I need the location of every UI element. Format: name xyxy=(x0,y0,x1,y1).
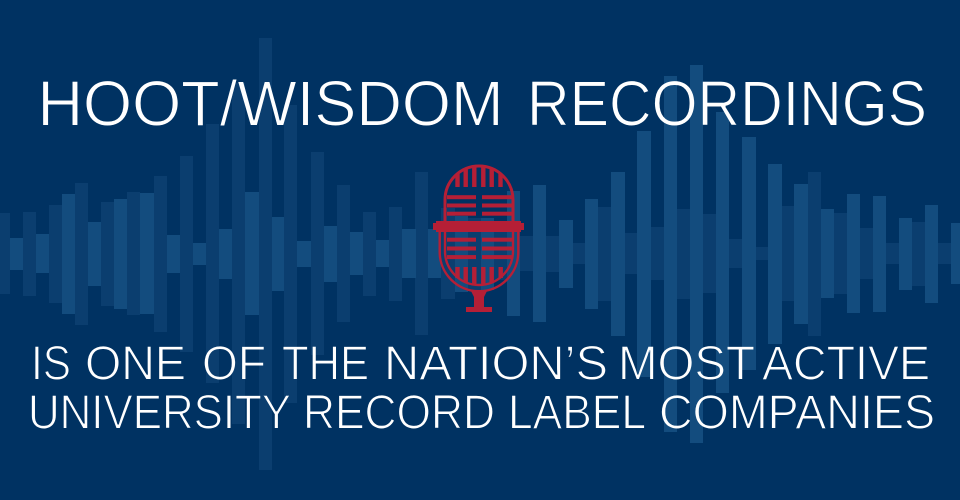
subtitle line one: THE xyxy=(282,338,369,390)
subtitle line two: UNIVERSITY xyxy=(28,386,291,440)
subtitle line two: RECORD xyxy=(303,386,495,440)
title: Hoot/Wisdom Recordings: RECORDINGS xyxy=(527,68,927,140)
subtitle line one: NATION’S xyxy=(384,338,608,390)
subtitle line one: IS xyxy=(31,338,71,390)
subtitle line one: ACTIVE xyxy=(762,338,930,390)
subtitle line one: MOST xyxy=(618,338,755,390)
subtitle line one xyxy=(31,338,930,390)
icon: red studio microphone xyxy=(433,166,524,312)
subtitle line one: ONE xyxy=(85,338,186,390)
audio waveform: lighter bars xyxy=(10,65,960,443)
title: Hoot/Wisdom Recordings: HOOT/WISDOM xyxy=(38,68,504,140)
title: Hoot/Wisdom Recordings xyxy=(38,68,927,140)
subtitle line two xyxy=(28,386,935,440)
subtitle line two: COMPANIES xyxy=(659,386,935,440)
subtitle line two: LABEL xyxy=(508,386,646,440)
subtitle line one: OF xyxy=(202,338,266,390)
